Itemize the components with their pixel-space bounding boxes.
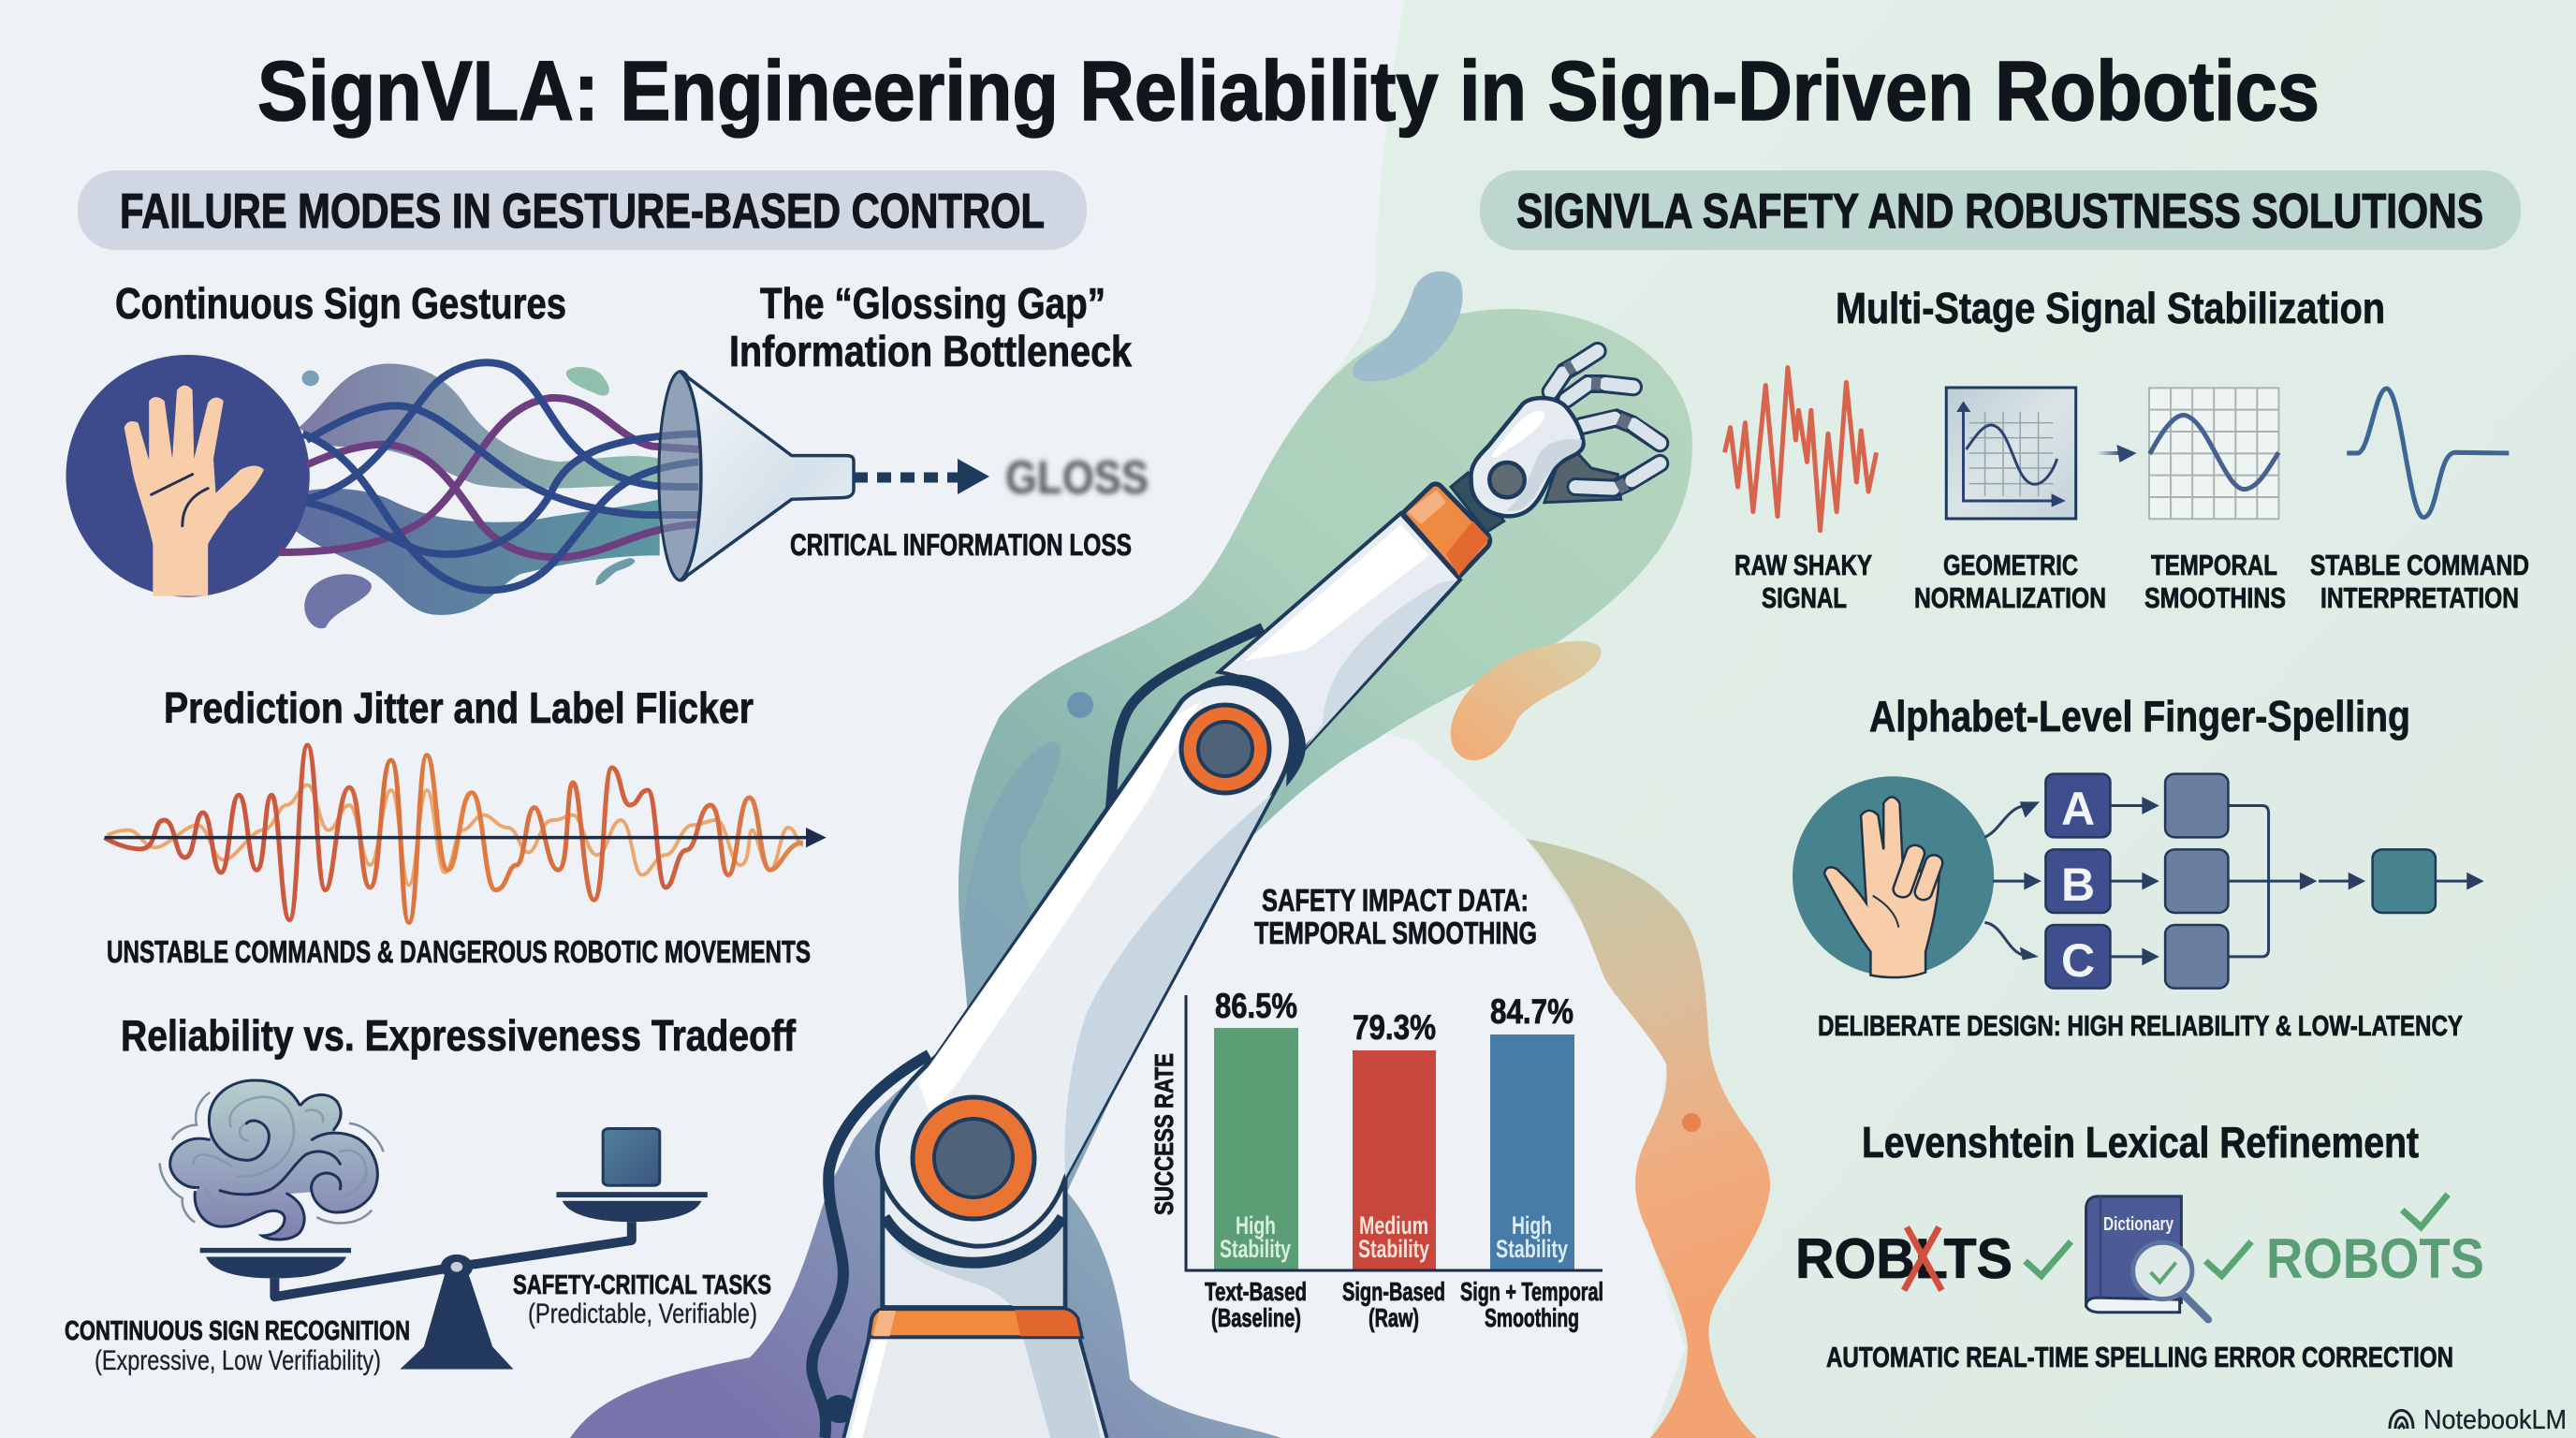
bar: sign-based: Stability bbox=[1358, 1235, 1429, 1263]
background: orange drop bbox=[1451, 641, 1602, 760]
right section pill heading bbox=[1480, 170, 2521, 250]
funnel cone bbox=[681, 372, 854, 580]
dictionary label: Dictionary bbox=[2103, 1214, 2174, 1235]
raw shaky signal icon bbox=[1724, 368, 1877, 531]
processing boxes bbox=[2165, 774, 2228, 989]
letters a b c bbox=[2061, 783, 2095, 987]
bar: text-based bbox=[1205, 987, 1307, 1332]
upper arm highlight bbox=[1244, 524, 1429, 661]
bar: text-based: Text-Based bbox=[1205, 1277, 1307, 1306]
arm base and cables bbox=[812, 1055, 1107, 1438]
fulcrum bbox=[400, 1255, 514, 1369]
bar: sign-based bbox=[1342, 1008, 1445, 1332]
labels: signal pipeline: TEMPORAL bbox=[2151, 549, 2277, 581]
forearm and links bbox=[877, 513, 1460, 1246]
bar: sign-based: 79.3% bbox=[1353, 1008, 1436, 1047]
signal pipeline icons bbox=[1724, 368, 2509, 531]
beam bbox=[274, 1222, 632, 1297]
caption: unstable commands: UNSTABLE COMMANDS & DANGEROUS ROBOTIC MOVEMENTS bbox=[107, 934, 811, 969]
spelling correction icons bbox=[1904, 1195, 2448, 1320]
lower link highlight bbox=[918, 701, 1200, 1115]
labels: signal pipeline: RAW SHAKY bbox=[1734, 549, 1872, 581]
upper arm shading bbox=[1304, 580, 1457, 750]
misspelled word: ROBLTS bbox=[1795, 1227, 2012, 1290]
background: central flowing blob bbox=[570, 309, 1692, 1438]
background: orange flowing blob bbox=[1526, 839, 1770, 1438]
panel: safety impact bar chart bbox=[1149, 883, 1603, 1332]
pedestal shading bbox=[1023, 1339, 1101, 1438]
cable clip bbox=[824, 1395, 856, 1423]
bar: sign-based: Sign-Based bbox=[1342, 1277, 1445, 1306]
finger palm web bbox=[1544, 451, 1621, 503]
heading: finger-spelling: Alphabet-Level Finger-Spelling bbox=[1869, 692, 2410, 741]
heading: prediction jitter: Prediction Jitter and Label Flicker bbox=[164, 683, 754, 732]
title: SignVLA: Engineering Reliability in Sign-Driven Robotics bbox=[257, 45, 2320, 139]
bar: text-based: (Baseline) bbox=[1211, 1303, 1301, 1332]
small drops bbox=[302, 367, 635, 628]
y axis label: SUCCESS RATE bbox=[1149, 1053, 1178, 1215]
jitter wave chart bbox=[105, 745, 827, 922]
left section pill heading: FAILURE MODES IN GESTURE-BASED CONTROL bbox=[120, 184, 1045, 239]
lower cable bbox=[812, 1055, 929, 1438]
cloud light swirls bbox=[194, 1097, 367, 1209]
chart title: SAFETY IMPACT DATA: bbox=[1262, 883, 1529, 917]
chart axes bbox=[1186, 995, 1603, 1270]
red cross bbox=[1904, 1227, 1941, 1290]
base joint bbox=[885, 1097, 1062, 1263]
geometric normalization icon bbox=[1946, 388, 2076, 519]
blurred gloss label: GLOSS bbox=[1005, 451, 1149, 504]
left pan bbox=[200, 1248, 351, 1278]
illustration: hand, tangled gesture strands and funnel bbox=[66, 355, 854, 628]
right pan bbox=[556, 1192, 708, 1222]
hand circle bbox=[66, 355, 310, 597]
ribbon upper bbox=[299, 363, 660, 489]
arrow heads bbox=[2020, 797, 2484, 965]
cloud fill bbox=[170, 1080, 377, 1240]
label: continuous sign recognition: (Expressive, Low Verifiability) bbox=[95, 1345, 381, 1376]
lower link shading bbox=[1064, 794, 1272, 1178]
pedestal edges bbox=[843, 1339, 1107, 1438]
signing hand bbox=[1824, 797, 1945, 977]
label: safety-critical tasks: SAFETY-CRITICAL TASKS bbox=[513, 1270, 771, 1300]
flow arrow bbox=[2097, 445, 2137, 462]
bar: sign-based: (Raw) bbox=[1368, 1303, 1419, 1332]
heading: continuous sign gestures: Continuous Sign Gestures bbox=[115, 279, 566, 328]
time axis arrow bbox=[105, 828, 827, 847]
bar: sign + temporal smoothing: Smoothing bbox=[1485, 1303, 1579, 1332]
stable command icon bbox=[2347, 389, 2509, 518]
swirling cloud bbox=[160, 1080, 383, 1240]
tradeoff scale illustration bbox=[200, 1128, 708, 1369]
ribbon lower bbox=[295, 489, 660, 615]
green checks bbox=[2026, 1195, 2448, 1276]
open palm hand bbox=[124, 386, 264, 596]
letters a b c: B bbox=[2061, 858, 2095, 911]
wrist connector bbox=[1451, 473, 1504, 532]
background: blue drop bbox=[1353, 271, 1463, 381]
temporal smoothing icon bbox=[2149, 388, 2278, 519]
red primary wave bbox=[105, 745, 803, 922]
labels: signal pipeline: SIGNAL bbox=[1762, 581, 1847, 614]
bar: sign + temporal smoothing: 84.7% bbox=[1490, 992, 1573, 1031]
chart title bbox=[1254, 883, 1537, 950]
flow arrows bbox=[1984, 806, 2469, 957]
bar: sign-based: Medium bbox=[1359, 1211, 1428, 1240]
background: right green panel bbox=[1310, 0, 2576, 1438]
labels: signal pipeline: GEOMETRIC bbox=[1943, 549, 2078, 581]
bar: sign + temporal smoothing: Stability bbox=[1496, 1235, 1568, 1263]
background: blue dot bbox=[1067, 692, 1093, 718]
label: continuous sign recognition bbox=[65, 1316, 410, 1376]
bar: sign + temporal smoothing: High bbox=[1512, 1211, 1552, 1240]
signing hand circle bbox=[1793, 776, 1994, 976]
upper cable bbox=[1106, 628, 1263, 834]
elbow dark crescent bbox=[1188, 676, 1304, 783]
orange collar bbox=[869, 1309, 1082, 1337]
cloud motion lines bbox=[160, 1093, 383, 1223]
labels: signal pipeline bbox=[1734, 549, 2529, 614]
dictionary book bbox=[2086, 1196, 2181, 1313]
letters a b c: A bbox=[2061, 783, 2095, 835]
bar: text-based: High bbox=[1236, 1211, 1276, 1240]
heading: reliability tradeoff: Reliability vs. Expressiveness Tradeoff bbox=[121, 1011, 797, 1060]
robot arm bbox=[812, 351, 1660, 1438]
bar: sign + temporal smoothing bbox=[1460, 992, 1603, 1332]
bar: text-based: Stability bbox=[1220, 1235, 1291, 1263]
heading: glossing gap bbox=[729, 279, 1132, 375]
column shading bbox=[884, 1217, 1063, 1306]
heading: levenshtein refinement: Levenshtein Lexical Refinement bbox=[1862, 1118, 2419, 1167]
label: safety-critical tasks bbox=[513, 1270, 771, 1329]
label: continuous sign recognition: CONTINUOUS SIGN RECOGNITION bbox=[65, 1316, 410, 1346]
bar: sign + temporal smoothing: Sign + Temporal bbox=[1460, 1277, 1603, 1306]
elbow joint bbox=[1181, 705, 1269, 793]
upper arm bbox=[1219, 513, 1460, 754]
palm bbox=[1471, 398, 1584, 516]
magnifier bbox=[2133, 1242, 2208, 1320]
bar: text-based: 86.5% bbox=[1215, 987, 1297, 1025]
labels: signal pipeline: INTERPRETATION bbox=[2320, 581, 2519, 614]
chart title: TEMPORAL SMOOTHING bbox=[1254, 916, 1537, 950]
finger-spelling diagram bbox=[1793, 774, 2484, 989]
orange secondary wave bbox=[108, 785, 803, 885]
output box bbox=[2373, 849, 2436, 913]
background: orange dot bbox=[1682, 1113, 1701, 1132]
heading: glossing gap: The “Glossing Gap” bbox=[760, 279, 1105, 328]
letters a b c: C bbox=[2061, 934, 2095, 987]
caption: critical information loss: CRITICAL INFORMATION LOSS bbox=[790, 528, 1132, 562]
funnel mouth bbox=[659, 372, 702, 580]
heading: multi-stage signal stabilization: Multi-Stage Signal Stabilization bbox=[1836, 284, 2385, 332]
labels: signal pipeline: SMOOTHINS bbox=[2144, 581, 2286, 614]
verifiable block bbox=[603, 1128, 660, 1185]
hand pivot bbox=[1489, 462, 1525, 497]
corrected word: ROBOTS bbox=[2266, 1227, 2484, 1290]
tangled strands bbox=[279, 362, 698, 590]
dashed arrow to gloss bbox=[854, 459, 989, 494]
base column bbox=[883, 1154, 1065, 1308]
labels: signal pipeline: NORMALIZATION bbox=[1914, 581, 2106, 614]
left section pill heading bbox=[78, 170, 1087, 250]
notebooklm logo: NotebookLM bbox=[2423, 1405, 2567, 1435]
heading: glossing gap: Information Bottleneck bbox=[729, 327, 1132, 375]
cloud dark outlines bbox=[170, 1080, 377, 1240]
robot hand bbox=[1402, 351, 1660, 578]
background: blue patch bbox=[962, 741, 1061, 1019]
base pedestal bbox=[843, 1339, 1107, 1438]
letter boxes bbox=[2045, 774, 2110, 989]
label: safety-critical tasks: (Predictable, Verifiable) bbox=[528, 1299, 757, 1329]
pedestal highlight bbox=[850, 1341, 887, 1438]
orange cuff bbox=[1402, 484, 1490, 578]
lower link bbox=[877, 683, 1291, 1246]
fingers bbox=[1551, 351, 1660, 489]
